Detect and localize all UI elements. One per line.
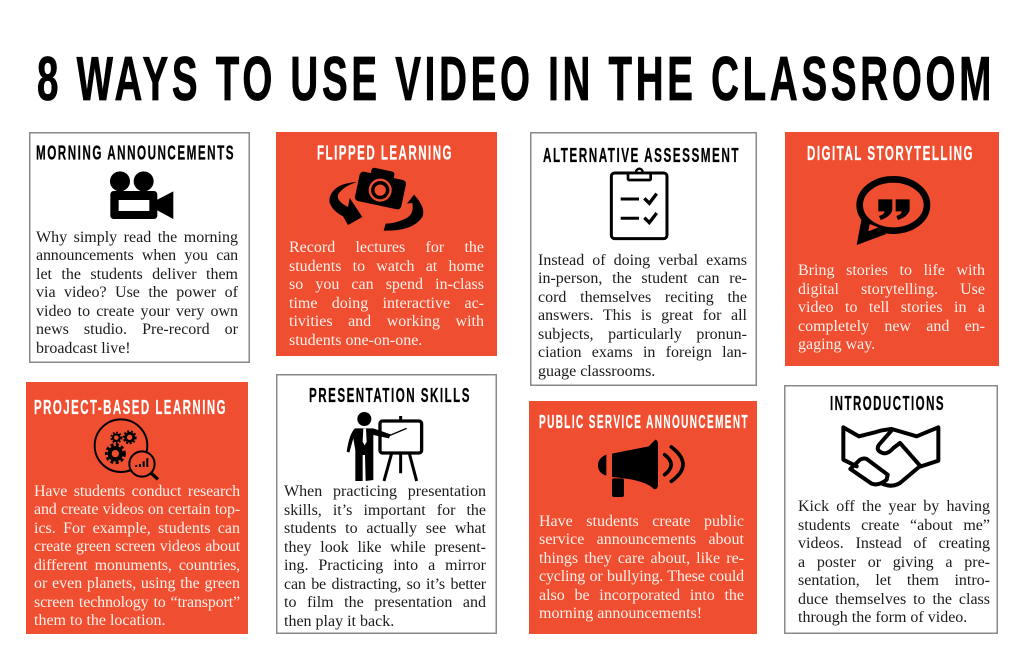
heading: alternative assessment: ALTERNATIVE ASSESSMENT [543,144,740,167]
text: alternative assessment: cord themselves reciting the [538,289,747,306]
text: introductions: a poster or giving a pre- [798,554,990,571]
text: introductions: through the form of video. [798,609,967,626]
heading: presentation skills: PRESENTATION SKILLS [309,384,471,407]
panel: introductions [784,385,998,634]
text: public service announcement: also be incorporated into the [539,587,744,604]
icon: video camera [110,171,174,219]
icon: handshake [841,425,940,488]
icon: gears and magnifier [94,418,159,480]
text: flipped learning: students to watch at home [289,258,484,275]
text: alternative assessment: in-person, the student can re- [538,270,747,287]
text: public service announcement [539,512,744,622]
text: public service announcement: cycling or bullying. These could [539,568,744,585]
text: flipped learning: tivities and working with [289,313,484,330]
text: project-based learning: ics. For example, students can [34,520,240,537]
panel: morning announcements [29,132,250,363]
text: introductions: Kick off the year by having [798,498,990,515]
text: morning announcements: announcements when you can [36,247,238,264]
heading: project-based learning: PROJECT-BASED LEARNING [34,396,227,419]
text: presentation skills [284,483,486,630]
icon: presenter at board [346,412,424,482]
text: morning announcements: news studio. Pre-record or [36,321,238,338]
text: alternative assessment: answers. This is great for all [538,307,747,324]
text: public service announcement: Have students create public [539,512,744,530]
text: project-based learning: or even planets, using the green [34,575,240,592]
text: presentation skills: students to actually see what [284,520,486,537]
panel: project-based learning [26,382,248,634]
text: morning announcements: let the students deliver them [36,266,238,283]
text: morning announcements [36,228,238,357]
text: digital storytelling [798,262,985,353]
text: morning announcements: Why simply read the morning [36,228,238,246]
heading: morning announcements: MORNING ANNOUNCEMENTS [36,142,235,164]
heading: flipped learning: FLIPPED LEARNING [317,142,453,164]
panel: presentation skills [276,374,497,634]
text: alternative assessment: guage classrooms. [538,363,655,380]
text: project-based learning: and create videos on certain top- [34,501,240,518]
text: presentation skills: to film the presentation and [284,594,486,611]
text: public service announcement: things they care about, like re- [539,550,744,567]
text: presentation skills: ing. Practicing into a mirror [284,557,486,574]
text: flipped learning [289,239,484,349]
text: digital storytelling: completely new and en- [798,318,985,335]
text: project-based learning: them to the location. [34,612,166,629]
text: flipped learning: so you can spend in-class [289,276,484,293]
text: project-based learning: screen technology to “transport” [34,594,240,611]
text: presentation skills: they look like while present- [284,539,486,556]
text: flipped learning: time doing interactive ac- [289,295,484,312]
text: project-based learning: Have students conduct research [34,482,240,500]
text: project-based learning [34,482,240,629]
text: public service announcement: morning announcements! [539,605,702,622]
panel: public service announcement [529,401,757,634]
text: morning announcements: broadcast live! [36,340,131,357]
text: introductions [798,498,990,626]
text: presentation skills: can be distracting, so it’s better [284,576,486,593]
text: presentation skills: then play it back. [284,613,394,630]
text: presentation skills: When practicing presentation [284,483,486,500]
text: flipped learning: Record lectures for the [289,239,484,256]
text: alternative assessment: subjects, particularly pronun- [538,326,747,343]
text: introductions: sentation, let them intro- [798,572,990,589]
text: digital storytelling: Bring stories to life with [798,262,985,279]
text: morning announcements: via video? Use the power of [36,284,238,301]
text: flipped learning: students one-on-one. [289,332,422,349]
icon: speech bubble with quotes [856,176,930,245]
icon: camera with rotating arrows [329,168,424,231]
text: project-based learning: different monuments, countries, [34,557,240,574]
icon: megaphone [598,440,685,497]
text: alternative assessment: ciation exams in foreign lan- [538,344,747,361]
text: digital storytelling: video to tell stories in a [798,299,985,316]
text: public service announcement: service announcements about [539,531,744,548]
text: project-based learning: create green screen videos about [34,538,240,555]
text: digital storytelling: digital storytelling. Use [798,281,985,298]
icon: clipboard checklist [610,168,668,240]
panel: digital storytelling [785,132,999,366]
heading: public service announcement: PUBLIC SERVICE ANNOUNCEMENT [539,411,749,432]
panel: flipped learning [276,132,497,356]
panel: alternative assessment [530,132,757,386]
text: introductions: videos. Instead of creating [798,535,990,552]
text: morning announcements: video to create your very own [36,303,238,320]
text: alternative assessment [538,252,747,380]
text: introductions: duce themselves to the class [798,591,990,608]
text: digital storytelling: gaging way. [798,336,875,353]
text: alternative assessment: Instead of doing verbal exams [538,252,747,268]
text: introductions: students create “about me” [798,517,990,534]
text: presentation skills: skills, it’s important for the [284,502,486,519]
